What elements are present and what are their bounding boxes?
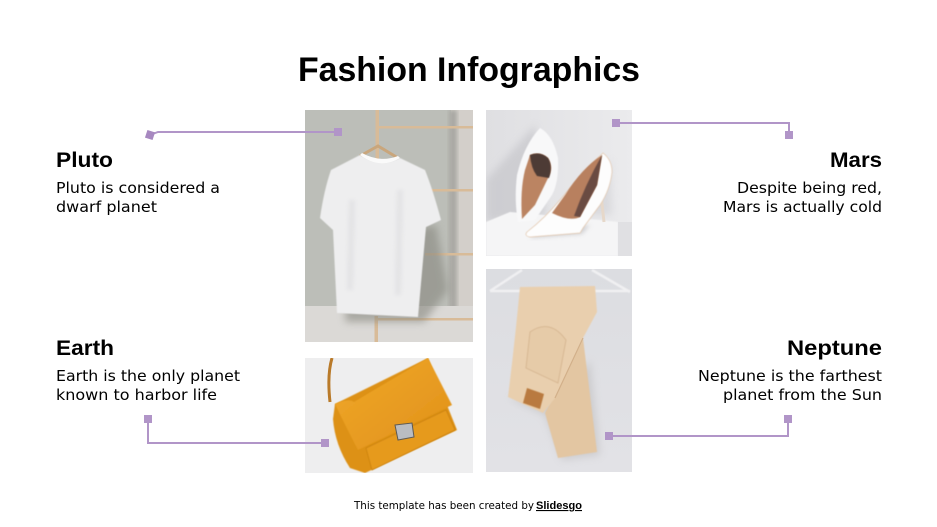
photo: white t-shirt on hanger bbox=[305, 110, 473, 342]
text block: Pluto: Pluto is considered a bbox=[56, 179, 220, 197]
text block: Neptune: Neptune is the farthest bbox=[698, 367, 882, 385]
text block: Pluto bbox=[56, 149, 220, 216]
text block: Neptune bbox=[698, 337, 882, 404]
text block: Mars: Mars is actually cold bbox=[723, 198, 882, 216]
footer credit: Slidesgo bbox=[536, 500, 582, 512]
photo: white high heels bbox=[486, 110, 632, 256]
footer credit: This template has been created by bbox=[353, 500, 534, 512]
photo: mustard handbag bbox=[305, 358, 473, 473]
connector: Neptune bbox=[605, 415, 792, 440]
text block: Mars: Mars bbox=[830, 149, 882, 172]
text block: Pluto: Pluto bbox=[56, 149, 113, 172]
photo: beige trousers on hanger bbox=[486, 269, 632, 472]
text block: Earth: Earth bbox=[56, 337, 114, 360]
text block: Mars: Despite being red, bbox=[737, 179, 882, 197]
connector: Mars bbox=[612, 119, 793, 139]
text block: Earth: known to harbor life bbox=[56, 386, 217, 404]
connector: Earth bbox=[144, 415, 329, 447]
text block: Mars bbox=[723, 149, 882, 216]
text block: Neptune: Neptune bbox=[787, 337, 882, 360]
text block: Pluto: dwarf planet bbox=[56, 198, 157, 216]
text block: Earth bbox=[56, 337, 240, 404]
text block: Earth: Earth is the only planet bbox=[56, 367, 240, 385]
text block: Neptune: planet from the Sun bbox=[723, 386, 882, 404]
connector: Pluto bbox=[145, 128, 342, 140]
title: Fashion Infographics bbox=[298, 51, 640, 89]
